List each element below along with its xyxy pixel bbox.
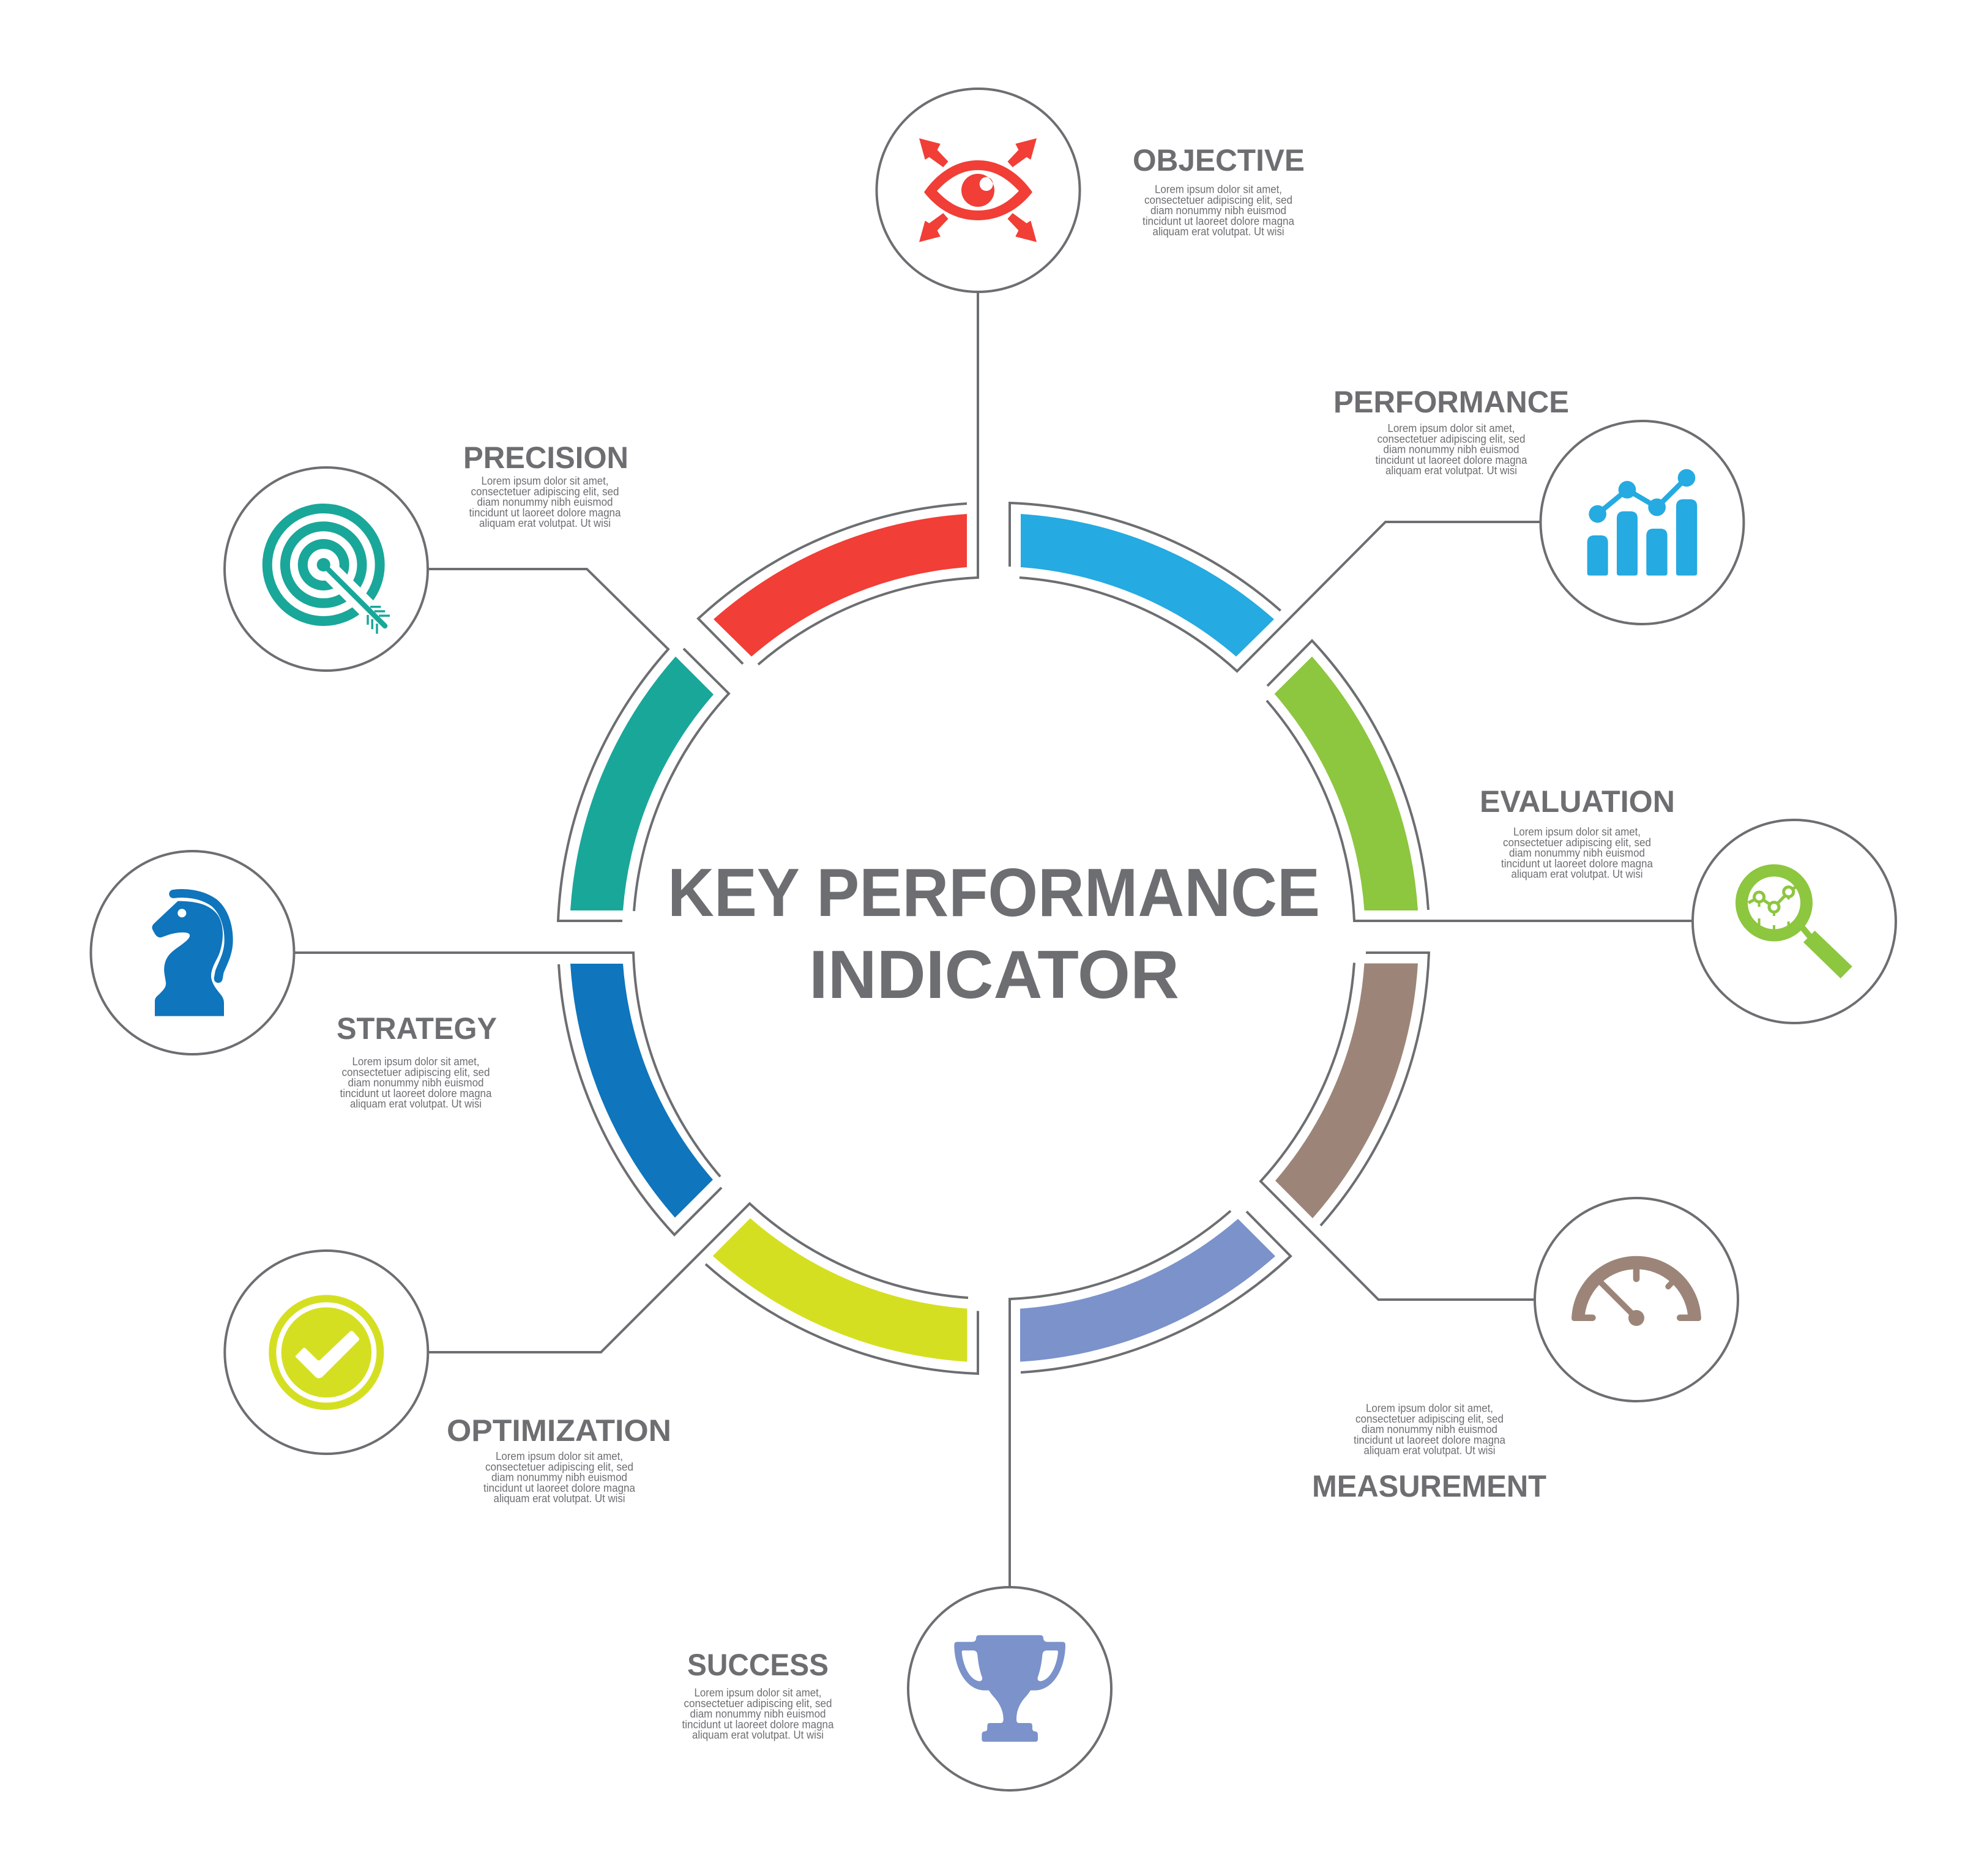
text: objective: consectetuer adipiscing elit, sed [1144, 194, 1292, 206]
heading: objective: OBJECTIVE [1133, 143, 1305, 177]
heading: evaluation: EVALUATION [1480, 784, 1675, 819]
text: precision [469, 475, 621, 529]
ring outline: performance [1010, 503, 1540, 671]
circle: optimization [225, 1251, 428, 1454]
text: performance [1376, 422, 1527, 477]
text: strategy: tincidunt ut laoreet dolore magna [340, 1087, 492, 1100]
panel: precision [225, 441, 628, 671]
panel: strategy [91, 851, 497, 1110]
icon: bar chart with trend line [1587, 469, 1697, 576]
icon: target with arrow [267, 508, 395, 636]
ring segment: objective [714, 514, 967, 657]
heading: strategy: STRATEGY [337, 1011, 497, 1046]
circle: precision [225, 467, 428, 671]
circle: success [908, 1587, 1111, 1790]
icon: speedometer gauge [1571, 1256, 1701, 1326]
text: strategy [340, 1055, 492, 1110]
ring segment: measurement [1275, 963, 1418, 1218]
heading: precision: PRECISION [463, 441, 628, 475]
text: measurement: consectetuer adipiscing elit, sed [1355, 1413, 1504, 1425]
text: precision: tincidunt ut laoreet dolore magna [469, 507, 621, 519]
text: optimization: diam nonummy nibh euismod [491, 1472, 627, 1484]
ring outline: objective [698, 291, 978, 664]
icon: check mark badge [269, 1295, 384, 1410]
text: performance: tincidunt ut laoreet dolore magna [1376, 454, 1527, 466]
ring segment: success [1020, 1219, 1275, 1362]
panel: optimization [225, 1251, 671, 1505]
text: strategy: consectetuer adipiscing elit, sed [341, 1066, 490, 1078]
text: precision: Lorem ipsum dolor sit amet, [481, 475, 608, 487]
text: optimization: tincidunt ut laoreet dolore magna [483, 1482, 636, 1494]
text: objective: tincidunt ut laoreet dolore magna [1143, 215, 1295, 227]
text: objective: aliquam erat volutpat. Ut wisi [1153, 226, 1284, 238]
circle: strategy [91, 851, 294, 1054]
ring segment: precision [570, 657, 714, 910]
text: optimization: aliquam erat volutpat. Ut wisi [493, 1492, 625, 1505]
panel: evaluation [1480, 784, 1896, 1023]
panel: objective [876, 89, 1305, 292]
ring outline: precision [429, 569, 729, 921]
text: objective [1143, 184, 1295, 238]
ring segment: strategy [570, 964, 713, 1218]
text: success: tincidunt ut laoreet dolore magna [682, 1718, 834, 1730]
text: performance: Lorem ipsum dolor sit amet, [1388, 422, 1515, 434]
text: performance: consectetuer adipiscing elit, sed [1377, 433, 1525, 445]
text: measurement: Lorem ipsum dolor sit amet, [1366, 1402, 1493, 1415]
ring outline: evaluation [1267, 641, 1691, 921]
text: evaluation: consectetuer adipiscing elit, sed [1503, 836, 1651, 849]
title [668, 855, 1320, 1013]
text: evaluation: diam nonummy nibh euismod [1509, 847, 1645, 859]
text: evaluation: tincidunt ut laoreet dolore magna [1501, 857, 1653, 869]
icon: chess knight [152, 893, 229, 1016]
text: precision: aliquam erat volutpat. Ut wisi [479, 517, 611, 529]
text: objective: Lorem ipsum dolor sit amet, [1155, 184, 1282, 196]
title: INDICATOR [809, 937, 1179, 1013]
text: performance: diam nonummy nibh euismod [1383, 444, 1519, 456]
panel: success [682, 1587, 1111, 1790]
circle: performance [1541, 421, 1744, 624]
text: strategy: aliquam erat volutpat. Ut wisi [350, 1098, 482, 1110]
heading: optimization: OPTIMIZATION [447, 1413, 671, 1448]
text: optimization: Lorem ipsum dolor sit amet, [496, 1450, 623, 1462]
heading: performance: PERFORMANCE [1333, 385, 1569, 419]
text: success: consectetuer adipiscing elit, sed [684, 1697, 832, 1710]
text: objective: diam nonummy nibh euismod [1150, 204, 1286, 217]
panel: measurement [1312, 1198, 1738, 1503]
ring outline: success [1010, 1211, 1291, 1586]
text: evaluation [1501, 826, 1653, 880]
text: success [682, 1686, 834, 1741]
ring segment: evaluation [1275, 657, 1418, 910]
circle: evaluation [1693, 820, 1896, 1023]
text: success: aliquam erat volutpat. Ut wisi [692, 1729, 824, 1741]
text: measurement: diam nonummy nibh euismod [1362, 1423, 1497, 1435]
ring segment: performance [1021, 514, 1274, 657]
text: evaluation: Lorem ipsum dolor sit amet, [1513, 826, 1641, 838]
text: success: diam nonummy nibh euismod [690, 1708, 826, 1720]
ring outline: strategy [295, 953, 721, 1235]
heading: success: SUCCESS [687, 1648, 829, 1682]
text: measurement: aliquam erat volutpat. Ut wisi [1363, 1445, 1496, 1457]
ring outline: optimization [429, 1204, 978, 1374]
text: optimization: consectetuer adipiscing elit, sed [485, 1461, 633, 1473]
text: evaluation: aliquam erat volutpat. Ut wisi [1512, 868, 1642, 880]
text: strategy: Lorem ipsum dolor sit amet, [352, 1055, 480, 1068]
circle: measurement [1535, 1198, 1738, 1401]
panel: performance [1333, 385, 1744, 624]
circle: objective [876, 89, 1079, 292]
text: success: Lorem ipsum dolor sit amet, [694, 1686, 821, 1699]
text: strategy: diam nonummy nibh euismod [348, 1077, 483, 1089]
text: precision: diam nonummy nibh euismod [477, 496, 613, 508]
title: KEY PERFORMANCE [668, 855, 1320, 931]
text: measurement: tincidunt ut laoreet dolore magna [1354, 1434, 1506, 1446]
ring segment: optimization [713, 1218, 967, 1362]
ring outline: measurement [1261, 953, 1534, 1300]
icon: magnifier [1742, 870, 1852, 978]
icon: trophy [954, 1635, 1065, 1742]
text: optimization [483, 1450, 636, 1505]
heading: measurement: MEASUREMENT [1312, 1469, 1546, 1503]
text: performance: aliquam erat volutpat. Ut wisi [1385, 464, 1517, 477]
text: measurement [1354, 1402, 1506, 1457]
text: precision: consectetuer adipiscing elit, sed [471, 485, 619, 497]
icon: eye with arrows [919, 138, 1037, 242]
